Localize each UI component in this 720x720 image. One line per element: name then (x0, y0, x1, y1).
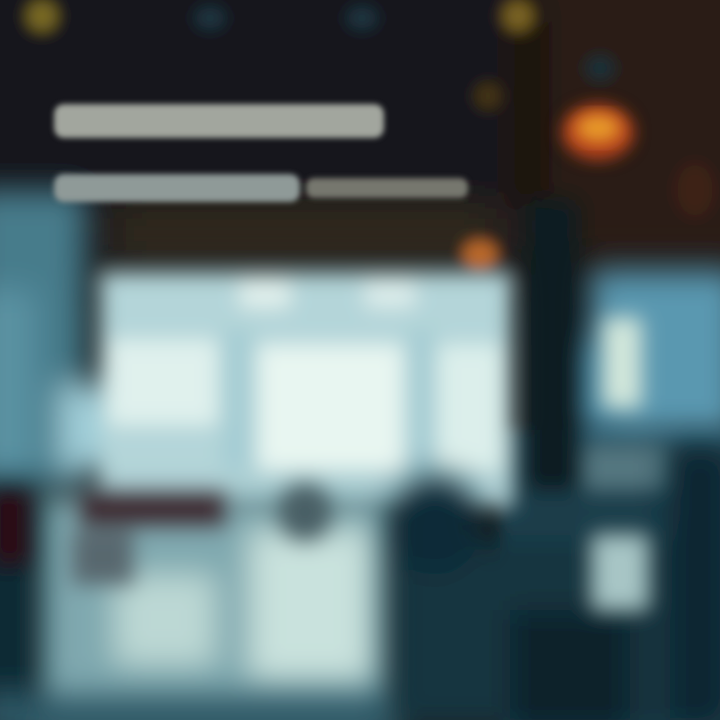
headline line two (54, 174, 300, 202)
background ceiling (0, 0, 720, 270)
headline line one (54, 104, 384, 138)
left wall glass (0, 190, 140, 490)
orange hanging lamp (562, 104, 634, 160)
floor reflection (30, 495, 395, 720)
bright patch in right foreground (592, 535, 648, 610)
ceiling lights (26, 0, 715, 218)
headline line two tail (306, 178, 468, 198)
dark column (510, 0, 578, 490)
foreground silhouettes (389, 445, 720, 720)
small orange lamp (462, 240, 498, 270)
lower right base (500, 430, 720, 720)
right window highlight (580, 318, 670, 490)
right window (572, 270, 720, 435)
central window (100, 272, 512, 507)
red chairs and seated figures (0, 482, 333, 585)
blurred headline block (54, 104, 468, 202)
bottom left dark edge (0, 490, 400, 720)
